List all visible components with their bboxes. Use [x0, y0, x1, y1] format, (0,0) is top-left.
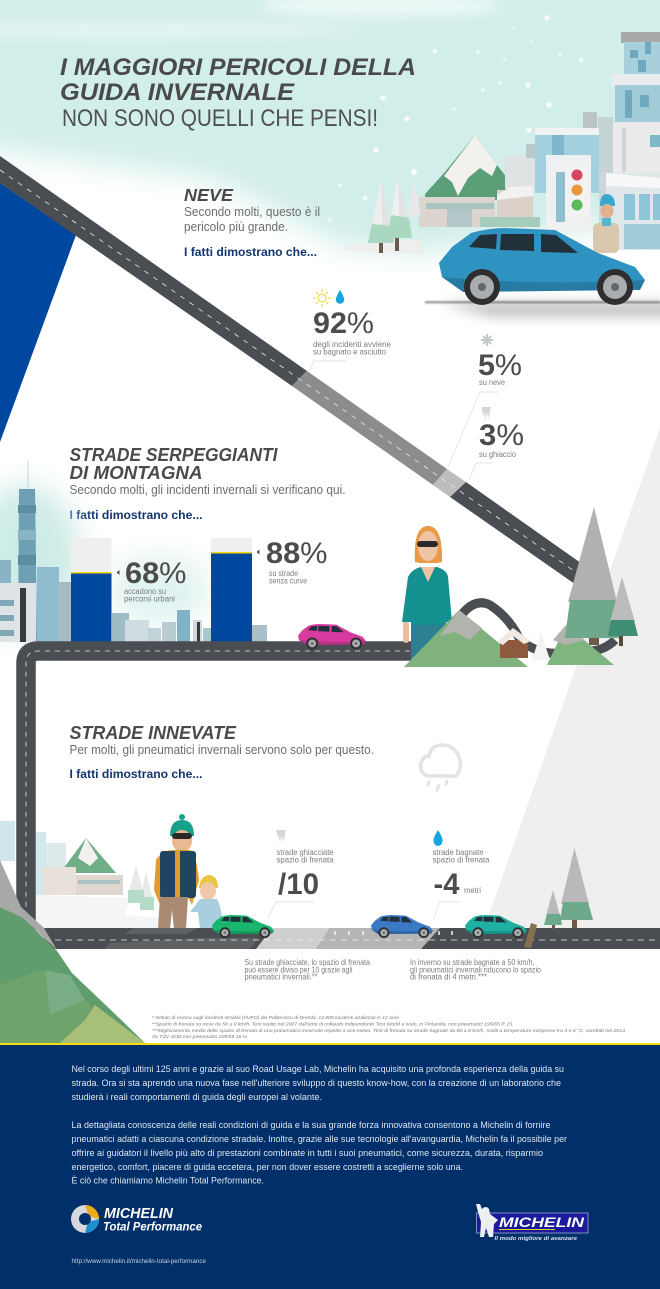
- section: mountain roads: [70, 445, 346, 522]
- section: snowy roads: [70, 723, 374, 781]
- label: 68%: percorsi urbani: [124, 594, 175, 604]
- title: I MAGGIORI PERICOLI DELLA: [60, 54, 416, 81]
- man with green hat: [154, 814, 199, 929]
- tower far right: [612, 32, 660, 178]
- section: snow: NEVE: [184, 185, 234, 205]
- diagonal road split by share of accidents: [0, 156, 605, 596]
- chalet: [497, 628, 531, 658]
- title: [60, 54, 416, 132]
- footnotes: da TÜV SÜD con pneumatici 205/55 16 H.: [152, 1033, 248, 1039]
- bar chart: 68% and 88%: [71, 537, 328, 642]
- mountains with chalet: [404, 610, 614, 667]
- stat: 5% snow: [448, 334, 522, 467]
- bar: 68% urban: [71, 538, 112, 642]
- winter town illustration: [340, 32, 660, 255]
- caption: strade bagnate: [432, 848, 484, 857]
- green car: [212, 915, 274, 938]
- label: 88%: su strade: [269, 569, 298, 578]
- icon: water drop: [336, 290, 344, 304]
- curved mountain road: [452, 603, 615, 653]
- section: mountain roads: DI MONTAGNA: [70, 463, 202, 483]
- stat: wet roads: metri: [464, 886, 481, 895]
- stat: 92% dry and wet: [310, 289, 392, 371]
- caption: su ghiaccio: [479, 450, 517, 459]
- value: 3%: [479, 419, 524, 452]
- icon: snowflake: [481, 334, 493, 346]
- logo: Michelin with Bibendum: MICHELIN: [499, 1215, 584, 1230]
- footer panel: [0, 1043, 660, 1289]
- footnotes: **Spazio di frenata su neve da 50 a 0 km/h. Test svolto nel 2007 dall'ente di collaudo indipendente Test World a Ivalo, in Finlandia, con pneumatici 195/65 R 15.: [152, 1022, 514, 1027]
- pine trees near road end: [565, 507, 638, 646]
- traffic light: [566, 163, 589, 217]
- bar: 88% no curves: [211, 538, 252, 642]
- about text: La dettagliata conoscenza delle reali condizioni di guida e la sua grande forza innovativa consentono a Michelin di fornire: [72, 1120, 550, 1131]
- about text: pneumatici adatti a ciascuna condizione stradale. Inoltre, grazie alle sue tecnologie all'avanguardia, Michelin fa il possibile per: [72, 1134, 568, 1145]
- label: 88%: [256, 537, 328, 586]
- section: mountain roads: I fatti dimostrano che...: [70, 508, 202, 522]
- value: 92%: [313, 307, 374, 340]
- section: mountain roads: STRADE SERPEGGIANTI: [70, 445, 278, 465]
- logo: Michelin Total Performance: MICHELIN: [104, 1206, 174, 1222]
- snowy trees: [340, 177, 425, 255]
- website address: http://www.michelin.it/michelin-total-performance: [72, 1259, 207, 1265]
- stat: icy roads: [268, 830, 334, 918]
- about text: strada. Ora si sta aprendo una nuova fase nell'ulteriore sviluppo di questo know-how, con la creazione di un laboratorio che: [72, 1078, 561, 1089]
- small snowy town on the left: [0, 821, 165, 928]
- title: GUIDA INVERNALE: [60, 79, 295, 106]
- value: 5%: [478, 349, 522, 382]
- section: snow: [184, 185, 320, 259]
- explanation: icy roads: può essere diviso per 10 grazie agli: [244, 965, 353, 974]
- about text: È ciò che chiamiamo Michelin Total Performance.: [72, 1176, 264, 1186]
- stat: 3% ice: [469, 407, 524, 480]
- section: snow: I fatti dimostrano che...: [184, 245, 317, 259]
- footnotes: [152, 1015, 625, 1039]
- caption: degli incidenti avviene: [313, 340, 392, 349]
- teal car: [465, 915, 527, 938]
- explanation: wet roads: [410, 958, 541, 982]
- blue triangle: [0, 183, 76, 442]
- pine trees by the road: [544, 848, 593, 929]
- section: snowy roads: Per molti, gli pneumatici invernali servono solo per questo.: [70, 743, 374, 757]
- about text: energetico, comfort, piacere di guida eccetera, per non dover essere costretti a sceglierne solo una.: [72, 1162, 463, 1173]
- explanation: wet roads: di frenata di 4 metri.***: [410, 973, 487, 982]
- winding road from city to snow section: [26, 651, 470, 930]
- icon: icicles: [276, 830, 286, 844]
- title: NON SONO QUELLI CHE PENSI!: [62, 105, 378, 132]
- label: 68%: 68%: [125, 557, 186, 590]
- green mountain: [0, 860, 145, 1043]
- low building on the right: [606, 173, 660, 250]
- caption: su neve: [479, 378, 506, 387]
- logo: Michelin Total Performance: Total Performance: [103, 1222, 203, 1234]
- section: mountain roads: Secondo molti, gli incidenti invernali si verificano qui.: [70, 483, 346, 497]
- woman with sunglasses: [402, 526, 452, 660]
- icon: sun: [313, 289, 331, 307]
- middle buildings: [505, 112, 613, 232]
- label: 68%: accadono su: [124, 587, 166, 596]
- stat: 92% dry and wet: su bagnato e asciutto: [313, 348, 387, 356]
- stat: wet roads: spazio di frenata: [432, 856, 490, 864]
- about text: studierà i reali comportamenti di guida degli europei al volante.: [72, 1092, 322, 1103]
- section: snowy roads: STRADE INNEVATE: [70, 723, 237, 743]
- section: snow: Secondo molti, questo è il: [184, 205, 320, 219]
- pink car: [298, 624, 366, 649]
- logo: Michelin with Bibendum: [476, 1204, 588, 1242]
- caption: strade ghiacciate: [276, 848, 334, 857]
- grey background slope: [484, 428, 660, 929]
- icon: water drop: [433, 830, 443, 846]
- city skyline behind bars: [0, 460, 267, 642]
- sky with snowfall: [0, 0, 660, 252]
- icon: icicles: [482, 407, 491, 421]
- explanation: wet roads: gli pneumatici invernali riducono lo spazio: [410, 965, 541, 974]
- child: [190, 875, 223, 929]
- footnotes: * Istituto di ricerca sugli incidenti stradali (VUFO) del Politecnico di Dresda: 12.000 incidenti analizzati in 12 anni.: [152, 1015, 400, 1020]
- explanation: icy roads: pneumatici invernali.**: [244, 973, 318, 982]
- logo: Michelin Total Performance: [71, 1205, 203, 1234]
- blue car with shadow: [425, 228, 660, 316]
- section: snow: pericolo più grande.: [184, 220, 288, 234]
- man with blue hat: [593, 194, 619, 253]
- section: snowy roads: I fatti dimostrano che...: [70, 767, 202, 781]
- mountain: [425, 135, 515, 200]
- about text: Nel corso degli ultimi 125 anni e grazie al suo Road Usage Lab, Michelin ha acquisito una profonda esperienza della guida su: [72, 1064, 564, 1075]
- explanation: icy roads: [244, 958, 370, 982]
- village houses: [419, 186, 540, 227]
- label: 88%: senza curve: [269, 576, 307, 586]
- explanation: icy roads: Su strade ghiacciate, lo spazio di frenata: [244, 958, 370, 967]
- label: 88%: 88%: [266, 537, 328, 570]
- about text: [72, 1064, 568, 1186]
- snowy road with braking distances: [44, 928, 660, 949]
- value: /10: [278, 868, 319, 901]
- label: 68%: [116, 557, 186, 604]
- blue car on the road: [371, 915, 433, 938]
- explanation: wet roads: In inverno su strade bagnate a 50 km/h,: [410, 958, 534, 967]
- stat: icy roads: spazio di frenata: [276, 856, 334, 864]
- footnotes: ***Miglioramento medio dello spazio di frenata di uno pneumatico invernale rispetto a uno estivo. Test di frenata su strade bagnate da 80 a 0 km/h, svolti a temperature comprese tra 4 e 6 °C, condotti nel 2013: [152, 1028, 625, 1033]
- logo: Michelin with Bibendum: Il modo migliore di avanzare: [494, 1236, 577, 1242]
- about text: offrire ai guidatori il livello più alto di prestazioni combinate in tutti i suoi pneumatici, come sicurezza, durata, risparmio: [72, 1148, 543, 1159]
- value: -4: [434, 868, 460, 901]
- icon: rain cloud: [421, 745, 460, 790]
- stat: wet roads: [432, 830, 490, 919]
- fallen log: [524, 923, 537, 948]
